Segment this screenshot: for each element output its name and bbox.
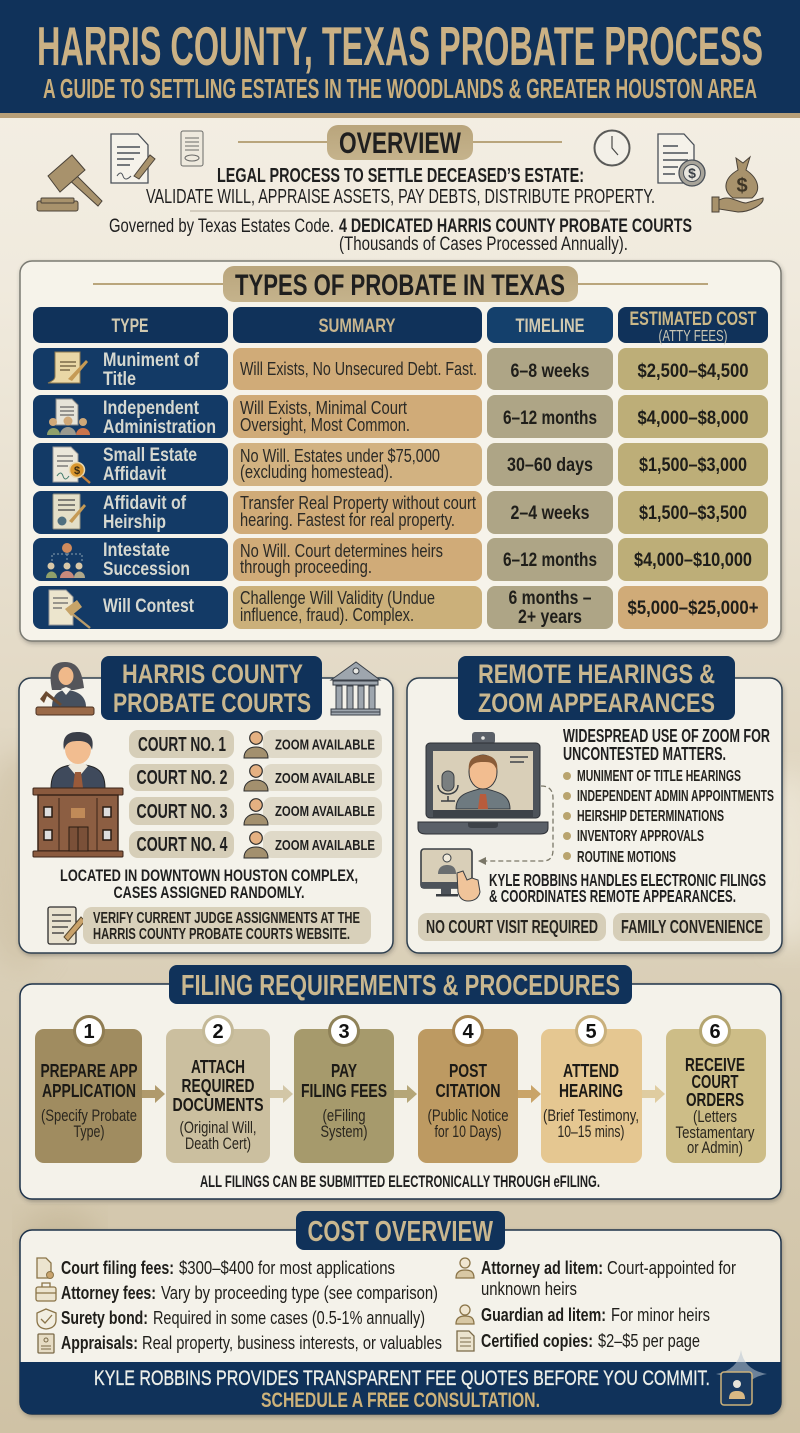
court no. 4 row: COURT NO. 4 xyxy=(136,834,228,856)
icon: monitor and hand xyxy=(421,849,480,901)
cost: certified copies: $2–$5 per page xyxy=(598,1331,700,1351)
call to action banner: SCHEDULE A FREE CONSULTATION. xyxy=(261,1388,540,1412)
cost: appraisals: Appraisals: xyxy=(61,1333,138,1353)
row: small estate affidavit: $1,500–$3,000 xyxy=(639,454,747,476)
table header row: TYPE xyxy=(112,316,148,337)
step 2: (Original Will, xyxy=(180,1118,256,1137)
court no. 2 row xyxy=(129,764,382,791)
icon: gavel xyxy=(37,155,102,211)
step 1: APPLICATION xyxy=(42,1080,136,1101)
step 4: POST xyxy=(449,1060,488,1081)
arrow: step 1 to 2 xyxy=(142,1085,165,1103)
badge: family convenience xyxy=(613,913,770,941)
cost: certified copies xyxy=(457,1331,700,1351)
court no. 1 row: COURT NO. 1 xyxy=(138,734,226,756)
step 5: 10–15 mins) xyxy=(558,1122,624,1141)
overview text: 4 DEDICATED HARRIS COUNTY PROBATE COURTS xyxy=(339,216,692,237)
row: muniment of title: Muniment of xyxy=(103,349,199,371)
icon: affidavit with magnifier xyxy=(53,447,90,483)
panel: Harris County probate courts xyxy=(19,656,393,953)
court no. 2 row: COURT NO. 2 xyxy=(136,767,228,789)
location note: CASES ASSIGNED RANDOMLY. xyxy=(114,884,304,902)
heading: filing requirements: FILING REQUIREMENTS & PROCEDURES xyxy=(181,970,620,1002)
icon: judge at bench xyxy=(36,662,94,715)
step 1: PREPARE APP xyxy=(40,1060,138,1081)
row: will contest: influence, fraud). Complex. xyxy=(240,604,414,625)
court no. 1 row: ZOOM AVAILABLE xyxy=(275,736,375,754)
cost: surety bond: Surety bond: xyxy=(61,1308,148,1328)
heading: remote hearings xyxy=(458,656,735,720)
heading: cost overview xyxy=(296,1211,505,1250)
row: affidavit of heirship: Transfer Real Property without court xyxy=(240,492,476,513)
table header row xyxy=(33,307,768,345)
row: muniment of title: Title xyxy=(103,368,136,390)
overview heading: OVERVIEW xyxy=(339,127,462,160)
step 4: CITATION xyxy=(436,1080,500,1101)
row: independent administration: 6–12 months xyxy=(503,407,597,429)
badge: no court visit: NO COURT VISIT REQUIRED xyxy=(426,917,598,937)
step 6: RECEIVE xyxy=(685,1054,745,1075)
step 3: System) xyxy=(320,1122,368,1141)
row: small estate affidavit: Affidavit xyxy=(103,463,166,485)
step 2: REQUIRED xyxy=(182,1075,254,1096)
row: affidavit of heirship: 2–4 weeks xyxy=(510,502,590,524)
eFiling note: ALL FILINGS CAN BE SUBMITTED ELECTRONICALLY THROUGH eFILING. xyxy=(200,1173,600,1191)
cost: attorney ad litem: Attorney ad litem: xyxy=(481,1258,603,1278)
overview text: (Thousands of Cases Processed Annually). xyxy=(339,234,628,255)
step 2 xyxy=(166,1015,270,1163)
icon: lawyer at podium xyxy=(33,732,123,857)
court no. 2 row: ZOOM AVAILABLE xyxy=(275,770,375,787)
cost: guardian ad litem xyxy=(456,1305,710,1325)
cost: attorney fees: Vary by proceeding type (see comparison) xyxy=(161,1283,438,1303)
row: affidavit of heirship: Heirship xyxy=(103,511,166,533)
step 4: for 10 Days) xyxy=(434,1122,502,1141)
overview text: Governed by Texas Estates Code. xyxy=(109,216,334,237)
row: independent administration xyxy=(33,395,768,438)
heading: probate courts xyxy=(101,656,322,720)
cost: attorney ad litem xyxy=(456,1258,736,1299)
step 4: (Public Notice xyxy=(428,1106,508,1125)
cost: attorney fees xyxy=(36,1283,438,1303)
Kyle Robbins note xyxy=(489,870,766,906)
step 6: Testamentary xyxy=(676,1123,755,1142)
step 3: FILING FEES xyxy=(301,1080,387,1101)
zoom text xyxy=(563,726,770,764)
cost: guardian ad litem: Guardian ad litem: xyxy=(481,1305,606,1325)
court no. 3 row: COURT NO. 3 xyxy=(136,801,228,823)
panel: filing requirements xyxy=(20,965,781,1199)
cost: court filing fees: $300–$400 for most applications xyxy=(179,1258,395,1278)
step 3: (eFiling xyxy=(322,1106,366,1125)
table header row: SUMMARY xyxy=(318,316,396,337)
row: small estate affidavit: No Will. Estates under $75,000 xyxy=(240,445,440,466)
step 2: DOCUMENTS xyxy=(172,1094,264,1115)
row: muniment of title: Will Exists, No Unsecured Debt. Fast. xyxy=(240,358,477,379)
step 5: ATTEND xyxy=(563,1060,619,1081)
overview section xyxy=(37,125,763,255)
row: affidavit of heirship: hearing. Fastest for real property. xyxy=(240,509,455,530)
header banner xyxy=(0,0,800,118)
row: intestate succession: $4,000–$10,000 xyxy=(634,549,752,571)
row: intestate succession xyxy=(33,538,768,581)
row: affidavit of heirship xyxy=(33,491,768,534)
court no. 1 row xyxy=(129,730,382,758)
row: affidavit of heirship: $1,500–$3,500 xyxy=(639,502,747,524)
step 1: Type) xyxy=(74,1122,104,1141)
verify judge note xyxy=(83,907,371,944)
verify judge note: HARRIS COUNTY PROBATE COURTS WEBSITE. xyxy=(93,926,350,943)
step 1 xyxy=(35,1015,142,1163)
heading: filing requirements xyxy=(169,965,632,1004)
row: independent administration: Independent xyxy=(103,397,199,419)
step 6: 6 xyxy=(709,1021,721,1043)
heading: probate courts: HARRIS COUNTY xyxy=(122,659,303,689)
overview text xyxy=(109,165,692,255)
step 3: PAY xyxy=(331,1060,357,1081)
arrow: step 4 to 5 xyxy=(518,1085,541,1103)
court no. 3 row xyxy=(129,797,382,825)
bulleted list xyxy=(563,768,774,866)
cost: court filing fees: Court filing fees: xyxy=(61,1258,174,1278)
court no. 4 row: ZOOM AVAILABLE xyxy=(275,837,375,854)
step 5: 5 xyxy=(585,1021,597,1043)
icon: family tree xyxy=(46,543,85,578)
step 6: or Admin) xyxy=(687,1138,743,1157)
heading: probate courts: PROBATE COURTS xyxy=(113,688,311,718)
row: independent administration: $4,000–$8,000 xyxy=(638,407,749,429)
row: muniment of title xyxy=(33,348,768,390)
row: intestate succession: Succession xyxy=(103,558,190,580)
step 5 xyxy=(541,1015,642,1163)
row: intestate succession: 6–12 months xyxy=(503,549,597,571)
step 1: 1 xyxy=(83,1021,95,1043)
location note: LOCATED IN DOWNTOWN HOUSTON COMPLEX, xyxy=(60,867,358,885)
icon: affidavit with magnifier: $ xyxy=(74,465,80,477)
row: will contest: Will Contest xyxy=(103,595,194,617)
step 6: (Letters xyxy=(693,1107,737,1126)
step 6: COURT xyxy=(692,1071,739,1092)
icon: document and people xyxy=(47,399,90,435)
row: affidavit of heirship: Affidavit of xyxy=(103,492,186,514)
row: will contest: $5,000–$25,000+ xyxy=(628,597,758,619)
cost: guardian ad litem: For minor heirs xyxy=(611,1305,710,1325)
cost: surety bond: Required in some cases (0.5-1% annually) xyxy=(153,1308,425,1328)
icon: courthouse columns xyxy=(331,662,380,715)
step 3: 3 xyxy=(338,1021,350,1043)
table header row: TIMELINE xyxy=(516,316,584,337)
row: will contest: 6 months – xyxy=(508,587,592,609)
row: will contest: 2+ years xyxy=(518,606,582,628)
cost: surety bond xyxy=(37,1308,425,1329)
bulleted list: INVENTORY APPROVALS xyxy=(577,828,704,845)
call to action banner xyxy=(20,1362,781,1414)
verify judge note: VERIFY CURRENT JUDGE ASSIGNMENTS AT THE xyxy=(93,910,360,927)
step 6 xyxy=(666,1015,766,1163)
step 2: 2 xyxy=(212,1021,224,1043)
cost: court filing fees xyxy=(37,1258,395,1278)
heading: cost overview: COST OVERVIEW xyxy=(308,1216,493,1248)
step 6: ORDERS xyxy=(686,1089,744,1110)
icon: sparkle and contact book xyxy=(716,1350,767,1405)
icon: money bag in hand xyxy=(712,157,763,212)
location note xyxy=(60,867,358,902)
row: independent administration: Oversight, Most Common. xyxy=(240,414,410,435)
row: small estate affidavit: Small Estate xyxy=(103,444,197,466)
icon: document with coin: $ xyxy=(688,165,696,181)
step 1: (Specify Probate xyxy=(41,1106,137,1125)
zoom text: UNCONTESTED MATTERS. xyxy=(563,744,726,764)
icon: money bag in hand: $ xyxy=(736,175,748,197)
step 5: HEARING xyxy=(559,1080,623,1101)
cost: certified copies: Certified copies: xyxy=(481,1331,593,1351)
arrow: step 5 to 6 xyxy=(642,1085,665,1103)
step 4 xyxy=(418,1015,518,1163)
row: muniment of title: 6–8 weeks xyxy=(510,360,590,382)
row: will contest xyxy=(33,586,768,629)
court no. 3 row: ZOOM AVAILABLE xyxy=(275,803,375,820)
icon: affidavit with seal xyxy=(53,494,86,529)
icon: clock xyxy=(594,130,630,166)
heading: remote hearings: ZOOM APPEARANCES xyxy=(478,688,715,718)
row: independent administration: Will Exists, Minimal Court xyxy=(240,397,407,418)
arrow: step 2 to 3 xyxy=(270,1085,293,1103)
step 2: ATTACH xyxy=(191,1056,245,1077)
row: intestate succession: through proceeding. xyxy=(240,556,372,577)
cost: attorney fees: Attorney fees: xyxy=(61,1283,156,1303)
icon: scroll and pen xyxy=(48,352,88,383)
overview text: LEGAL PROCESS TO SETTLE DECEASED’S ESTATE: xyxy=(217,165,584,187)
panel: types of probate xyxy=(20,261,781,641)
step 5: (Brief Testimony, xyxy=(543,1106,639,1125)
icon: document with coin xyxy=(658,134,705,186)
cost: appraisals xyxy=(38,1333,442,1353)
table header row: ESTIMATED COST xyxy=(630,309,757,330)
cost: appraisals: Real property, business interests, or valuables xyxy=(142,1333,442,1353)
panel: cost overview xyxy=(20,1211,781,1414)
arrow: laptop to monitor xyxy=(478,786,553,865)
badge: no court visit xyxy=(418,913,606,941)
table header row: (ATTY FEES) xyxy=(658,328,728,345)
row: independent administration: Administration xyxy=(103,416,216,438)
row: muniment of title: $2,500–$4,500 xyxy=(638,360,749,382)
icon: laptop with video call xyxy=(418,732,548,834)
icon: document and gavel xyxy=(49,590,90,628)
row: small estate affidavit: (excluding homestead). xyxy=(240,461,393,482)
step 4: 4 xyxy=(462,1021,474,1043)
step 3 xyxy=(294,1015,394,1163)
arrow: step 3 to 4 xyxy=(394,1085,417,1103)
row: intestate succession: No Will. Court determines heirs xyxy=(240,540,443,561)
bulleted list: ROUTINE MOTIONS xyxy=(577,849,676,866)
panel: remote hearings xyxy=(407,656,782,953)
row: small estate affidavit: 30–60 days xyxy=(507,454,593,476)
row: small estate affidavit xyxy=(33,443,768,486)
icon: notepad and pencil xyxy=(48,907,85,944)
icon: document with pen xyxy=(111,134,155,183)
icon: scroll xyxy=(181,131,203,166)
step 2: Death Cert) xyxy=(185,1134,251,1153)
court no. 4 row xyxy=(129,831,382,858)
heading: remote hearings: REMOTE HEARINGS & xyxy=(478,659,715,689)
heading: types of probate in Texas xyxy=(223,266,578,302)
cost: attorney ad litem: unknown heirs xyxy=(481,1279,577,1299)
heading: types of probate in Texas: TYPES OF PROBATE IN TEXAS xyxy=(235,269,565,302)
bulleted list: HEIRSHIP DETERMINATIONS xyxy=(577,808,724,825)
cost: attorney ad litem: Court-appointed for xyxy=(607,1258,736,1278)
row: intestate succession: Intestate xyxy=(103,539,170,561)
row: will contest: Challenge Will Validity (Undue xyxy=(240,587,435,608)
